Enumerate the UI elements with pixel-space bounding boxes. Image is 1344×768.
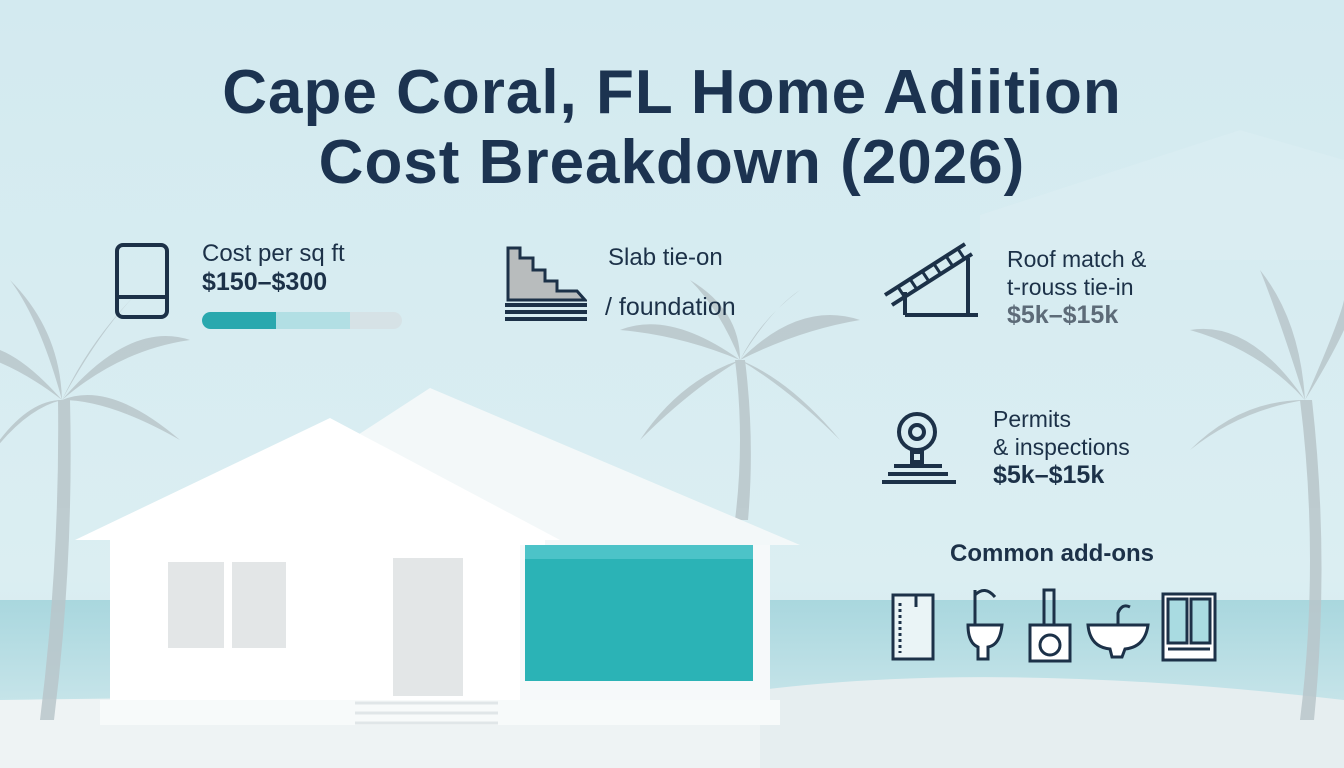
title	[222, 58, 1122, 197]
item: slab tie-on	[505, 244, 736, 321]
palms	[0, 270, 1344, 720]
icons: add-ons	[892, 588, 1216, 662]
text: Cost per sq ft	[202, 240, 345, 267]
icon: phone/panel	[115, 243, 169, 319]
icon: inspection seal	[882, 412, 956, 484]
icon: slab	[505, 246, 587, 321]
progress bar	[202, 312, 402, 329]
item: roof	[884, 242, 1146, 329]
heading: common add-ons: Common add-ons	[950, 540, 1154, 567]
text: $5k–$15k	[993, 461, 1104, 489]
text: Permits	[993, 406, 1071, 432]
text: $5k–$15k	[1007, 301, 1118, 329]
title: Cape Coral, FL Home Adiition	[222, 58, 1122, 127]
icon: roof	[884, 242, 978, 317]
text: & inspections	[993, 434, 1130, 460]
item: permits	[882, 406, 1130, 489]
text	[1007, 246, 1146, 329]
text: $150–$300	[202, 268, 327, 296]
item: slab tie-on: / foundation	[605, 293, 736, 321]
title: Cost Breakdown (2026)	[319, 128, 1025, 197]
text	[993, 406, 1130, 489]
text: Roof match &	[1007, 246, 1146, 272]
text: Slab tie-on	[608, 244, 723, 271]
text: t-rouss tie-in	[1007, 274, 1134, 300]
text	[202, 240, 345, 296]
item: cost per sq ft	[115, 240, 402, 329]
